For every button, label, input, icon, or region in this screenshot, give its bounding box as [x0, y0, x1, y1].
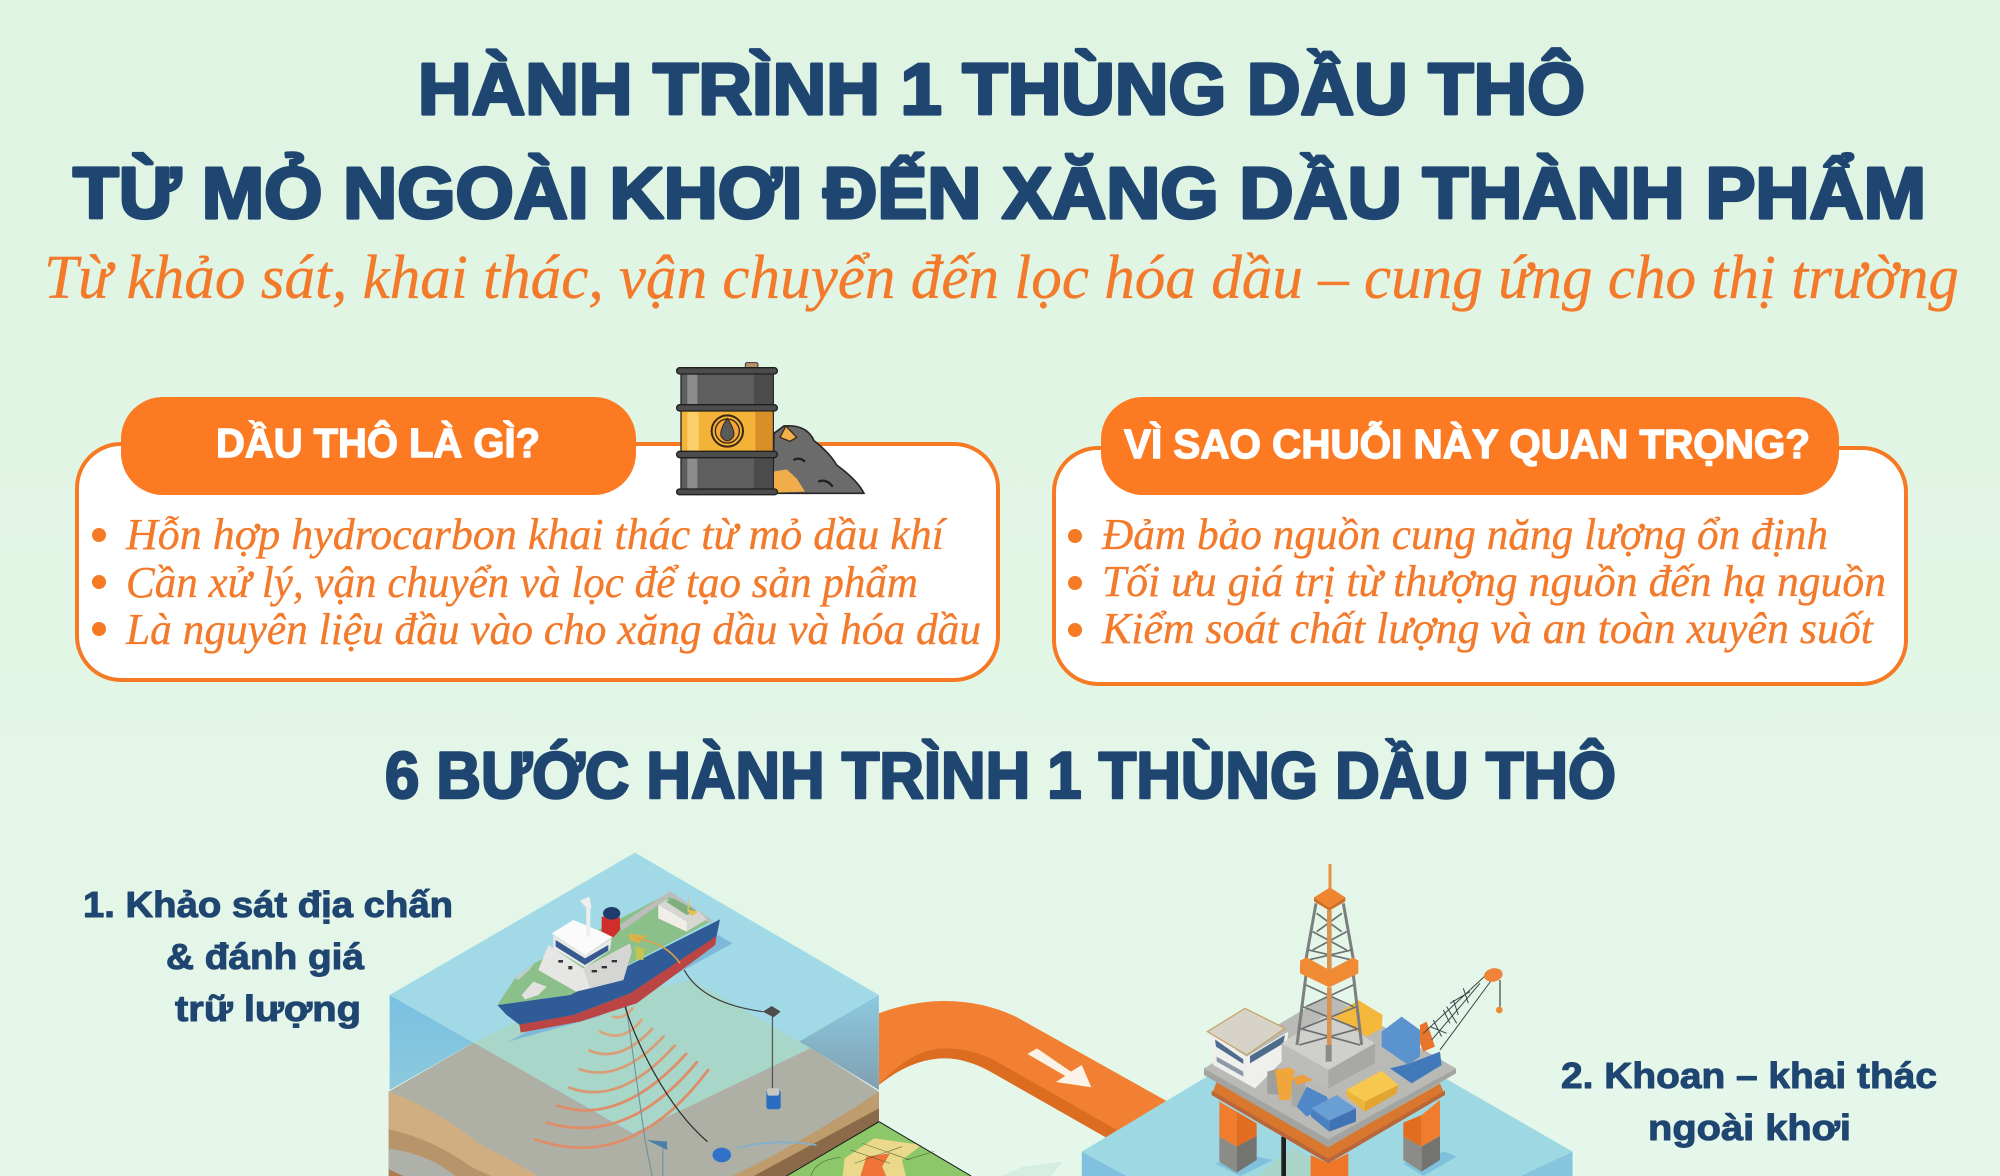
- bullet list right: Tối ưu giá trị từ thượng nguồn đến hạ nguồn: [1102, 557, 1886, 606]
- bullet list right: Đảm bảo nguồn cung năng lượng ổn định: [1101, 510, 1828, 559]
- yellow container front: [1346, 1071, 1398, 1112]
- title: TỪ MỎ NGOÀI KHƠI ĐẾN XĂNG DẦU THÀNH PHẨM: [73, 153, 1926, 234]
- platform body: [1204, 995, 1457, 1176]
- derrick lattice: [1297, 903, 1362, 1062]
- icon: oil barrel and crude pile: [677, 363, 864, 495]
- derrick crown: [1314, 864, 1345, 911]
- seabed and strata: [389, 1043, 971, 1176]
- reservoir map: [786, 1122, 971, 1176]
- panel card left: [77, 444, 998, 680]
- illustration: offshore platform: [1002, 864, 1573, 1176]
- step 2 label: 2. Khoan – khai thác: [1561, 1055, 1937, 1096]
- icon: survey ship: [497, 891, 720, 1033]
- blue container: [1311, 1095, 1356, 1132]
- panel: why this chain matters: [1054, 397, 1906, 684]
- heading pill left: [121, 397, 636, 495]
- derrick belt: [1300, 957, 1358, 987]
- heading pill right: [1101, 397, 1839, 495]
- illustration: seismic survey block: [389, 853, 971, 1176]
- derrick tower and crane: [1297, 864, 1504, 1062]
- platform base block: [1002, 1077, 1573, 1176]
- yellow container back: [1333, 1000, 1383, 1037]
- blue deck building: [1382, 1017, 1442, 1083]
- bullet list right: Kiểm soát chất lượng và an toàn xuyên suốt: [1101, 604, 1875, 653]
- cables and buoys: [509, 935, 816, 1176]
- subtitle: Từ khảo sát, khai thác, vận chuyển đến lọc hóa dầu – cung ứng cho thị trường: [44, 244, 1959, 312]
- platform legs: [1219, 1100, 1440, 1176]
- title: HÀNH TRÌNH 1 THÙNG DẦU THÔ: [418, 49, 1585, 130]
- section heading: 6 BƯỚC HÀNH TRÌNH 1 THÙNG DẦU THÔ: [385, 738, 1616, 812]
- bullet list left: Hỗn hợp hydrocarbon khai thác từ mỏ dầu khí: [125, 510, 948, 559]
- step 2 label: ngoài khơi: [1648, 1107, 1851, 1148]
- step 1 label: & đánh giá: [166, 936, 365, 977]
- accommodation building: [1207, 1008, 1288, 1088]
- crane: [1423, 967, 1504, 1050]
- platform deck: [1204, 995, 1456, 1163]
- bullet list right: [1068, 510, 1886, 653]
- bullet list left: Là nguyên liệu đầu vào cho xăng dầu và hóa dầu: [125, 605, 981, 654]
- step 1 label: trữ lượng: [175, 988, 361, 1029]
- water block faces: [390, 853, 879, 1137]
- step 2 label: [1561, 1055, 1937, 1148]
- utility tanks: [1267, 1067, 1330, 1117]
- arrow: step 1 to step 2: [879, 1001, 1168, 1138]
- panel card right: [1054, 448, 1906, 684]
- seismic waves and survey gear: [509, 935, 816, 1176]
- step 1 label: [83, 884, 453, 1029]
- heading pill left: DẦU THÔ LÀ GÌ?: [216, 420, 540, 466]
- derrick base: [1282, 1013, 1375, 1088]
- title: [73, 49, 1926, 234]
- panel: what is crude oil: [77, 397, 998, 680]
- step 1 label: 1. Khảo sát địa chấn: [83, 884, 453, 925]
- bullet list left: [92, 510, 981, 654]
- heading pill right: VÌ SAO CHUỖI NÀY QUAN TRỌNG?: [1124, 421, 1810, 467]
- bullet list left: Cần xử lý, vận chuyển và lọc để tạo sản phẩm: [126, 558, 918, 607]
